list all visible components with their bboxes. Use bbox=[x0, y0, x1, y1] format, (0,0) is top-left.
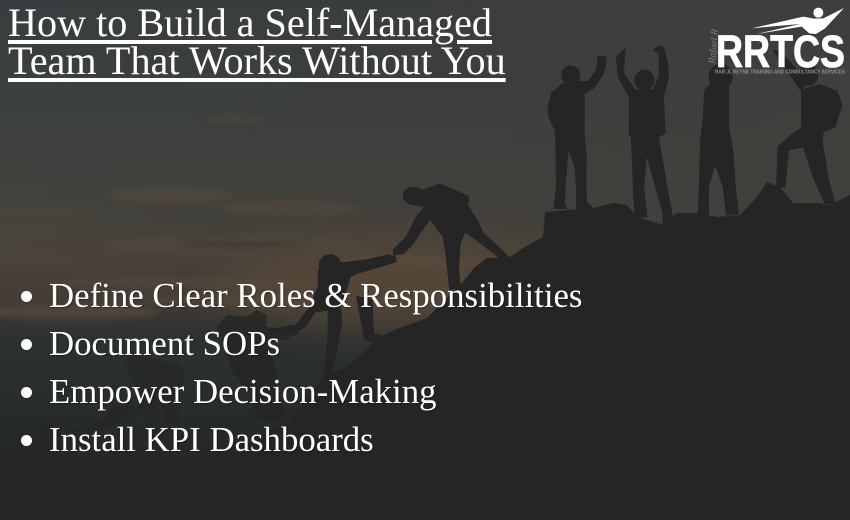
logo: RRTCS bbox=[707, 8, 846, 77]
bullet: dashboards: Install KPI Dashboards bbox=[49, 420, 374, 459]
climber reaching down, second from bottom bbox=[267, 255, 396, 377]
mountain ridge bbox=[0, 182, 850, 520]
bullet: SOPs: Document SOPs bbox=[49, 324, 280, 363]
cloud streaks bbox=[0, 114, 490, 319]
bullet: roles: Define Clear Roles & Responsibilities bbox=[49, 276, 582, 315]
title: Team That Works Without You bbox=[8, 38, 506, 83]
icon: running figure swoosh bbox=[752, 8, 844, 34]
bullet list bbox=[21, 276, 582, 459]
faded lower climbers bbox=[33, 310, 300, 520]
logo signature: Rafael R bbox=[707, 29, 721, 65]
title: How to Build a Self-Managed bbox=[8, 0, 492, 45]
bullet: decision-making: Empower Decision-Making bbox=[49, 372, 437, 411]
bending climber with backpack and four standing figures bbox=[393, 46, 842, 290]
title bbox=[8, 0, 506, 83]
